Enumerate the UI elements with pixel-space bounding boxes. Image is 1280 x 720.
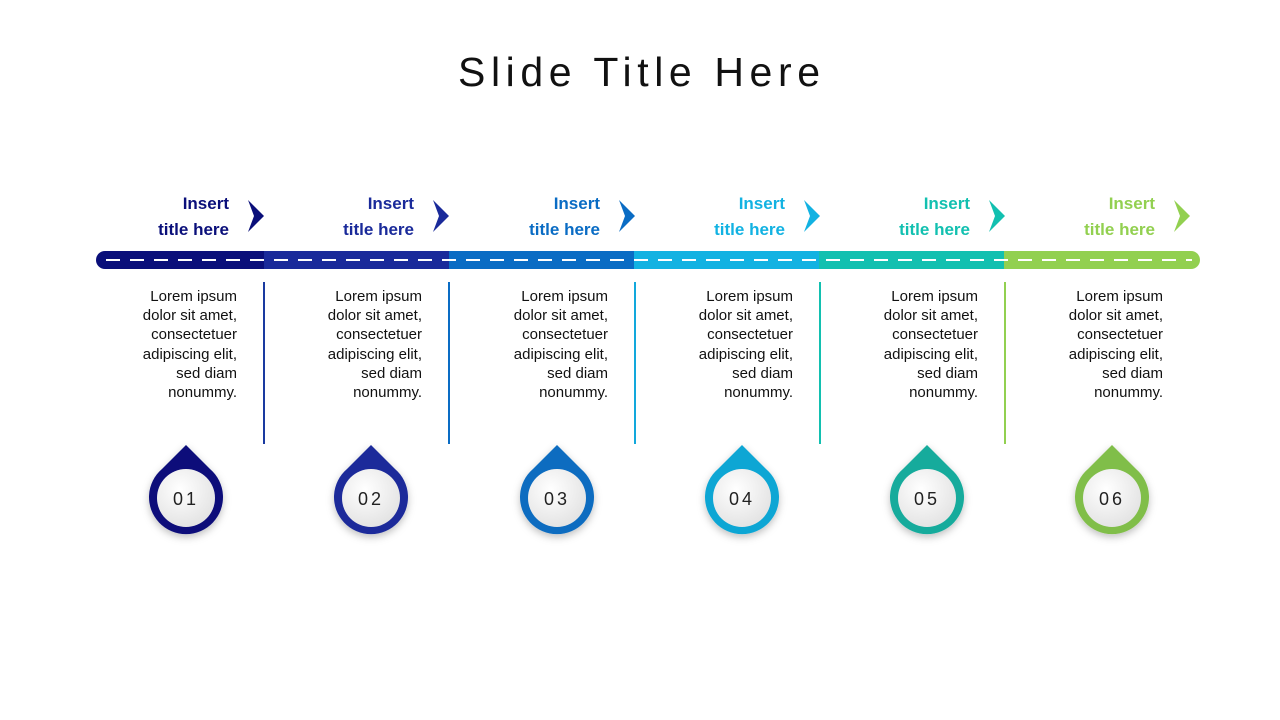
step 4: consectetuer xyxy=(707,326,793,343)
step 3: dolor sit amet, xyxy=(514,307,608,324)
step 6: Lorem ipsum xyxy=(1076,288,1163,305)
step 3: Lorem ipsum xyxy=(521,288,608,305)
step 5: consectetuer xyxy=(892,326,978,343)
step 5: 05 xyxy=(914,489,940,509)
step 5: sed diam xyxy=(917,365,978,382)
step 4: nonummy. xyxy=(724,384,793,401)
step 5: dolor sit amet, xyxy=(884,307,978,324)
step 4: Lorem ipsum xyxy=(706,288,793,305)
step 2: consectetuer xyxy=(336,326,422,343)
step 4: dolor sit amet, xyxy=(699,307,793,324)
step 6: sed diam xyxy=(1102,365,1163,382)
step 4: 04 xyxy=(729,489,755,509)
step 2: sed diam xyxy=(361,365,422,382)
step 4: Insert xyxy=(739,194,785,213)
step 2 xyxy=(328,194,450,534)
step 3: sed diam xyxy=(547,365,608,382)
step 3: adipiscing elit, xyxy=(514,346,608,363)
step 1: adipiscing elit, xyxy=(143,346,237,363)
step 6: 06 xyxy=(1099,489,1125,509)
step 1: title here xyxy=(158,220,229,239)
step 2: adipiscing elit, xyxy=(328,346,422,363)
step 4: adipiscing elit, xyxy=(699,346,793,363)
step 6: nonummy. xyxy=(1094,384,1163,401)
step 4: title here xyxy=(714,220,785,239)
step 5: title here xyxy=(899,220,970,239)
step 2: title here xyxy=(343,220,414,239)
step 3: nonummy. xyxy=(539,384,608,401)
step 5: adipiscing elit, xyxy=(884,346,978,363)
step 1: sed diam xyxy=(176,365,237,382)
step 1: consectetuer xyxy=(151,326,237,343)
timeline bar xyxy=(96,251,1200,269)
step 4 xyxy=(699,194,821,534)
step 6: Insert xyxy=(1109,194,1155,213)
step 3: title here xyxy=(529,220,600,239)
step 6: consectetuer xyxy=(1077,326,1163,343)
step 1 xyxy=(143,194,265,534)
step 1: Insert xyxy=(183,194,229,213)
step 5: Lorem ipsum xyxy=(891,288,978,305)
step 5 xyxy=(884,194,1006,534)
step 1: Lorem ipsum xyxy=(150,288,237,305)
step 2: nonummy. xyxy=(353,384,422,401)
step 3: Insert xyxy=(554,194,600,213)
step 3 xyxy=(514,194,636,534)
step 6: title here xyxy=(1084,220,1155,239)
step 2: Insert xyxy=(368,194,414,213)
step 2: 02 xyxy=(358,489,384,509)
step 6: adipiscing elit, xyxy=(1069,346,1163,363)
step 2: dolor sit amet, xyxy=(328,307,422,324)
step 6: dolor sit amet, xyxy=(1069,307,1163,324)
title: Slide Title Here xyxy=(458,49,820,95)
step 3: 03 xyxy=(544,489,570,509)
step 1: nonummy. xyxy=(168,384,237,401)
step 1: dolor sit amet, xyxy=(143,307,237,324)
step 5: nonummy. xyxy=(909,384,978,401)
step 4: sed diam xyxy=(732,365,793,382)
step 2: Lorem ipsum xyxy=(335,288,422,305)
step 1: 01 xyxy=(173,489,199,509)
step 6 xyxy=(1069,194,1190,534)
step 3: consectetuer xyxy=(522,326,608,343)
step 5: Insert xyxy=(924,194,970,213)
